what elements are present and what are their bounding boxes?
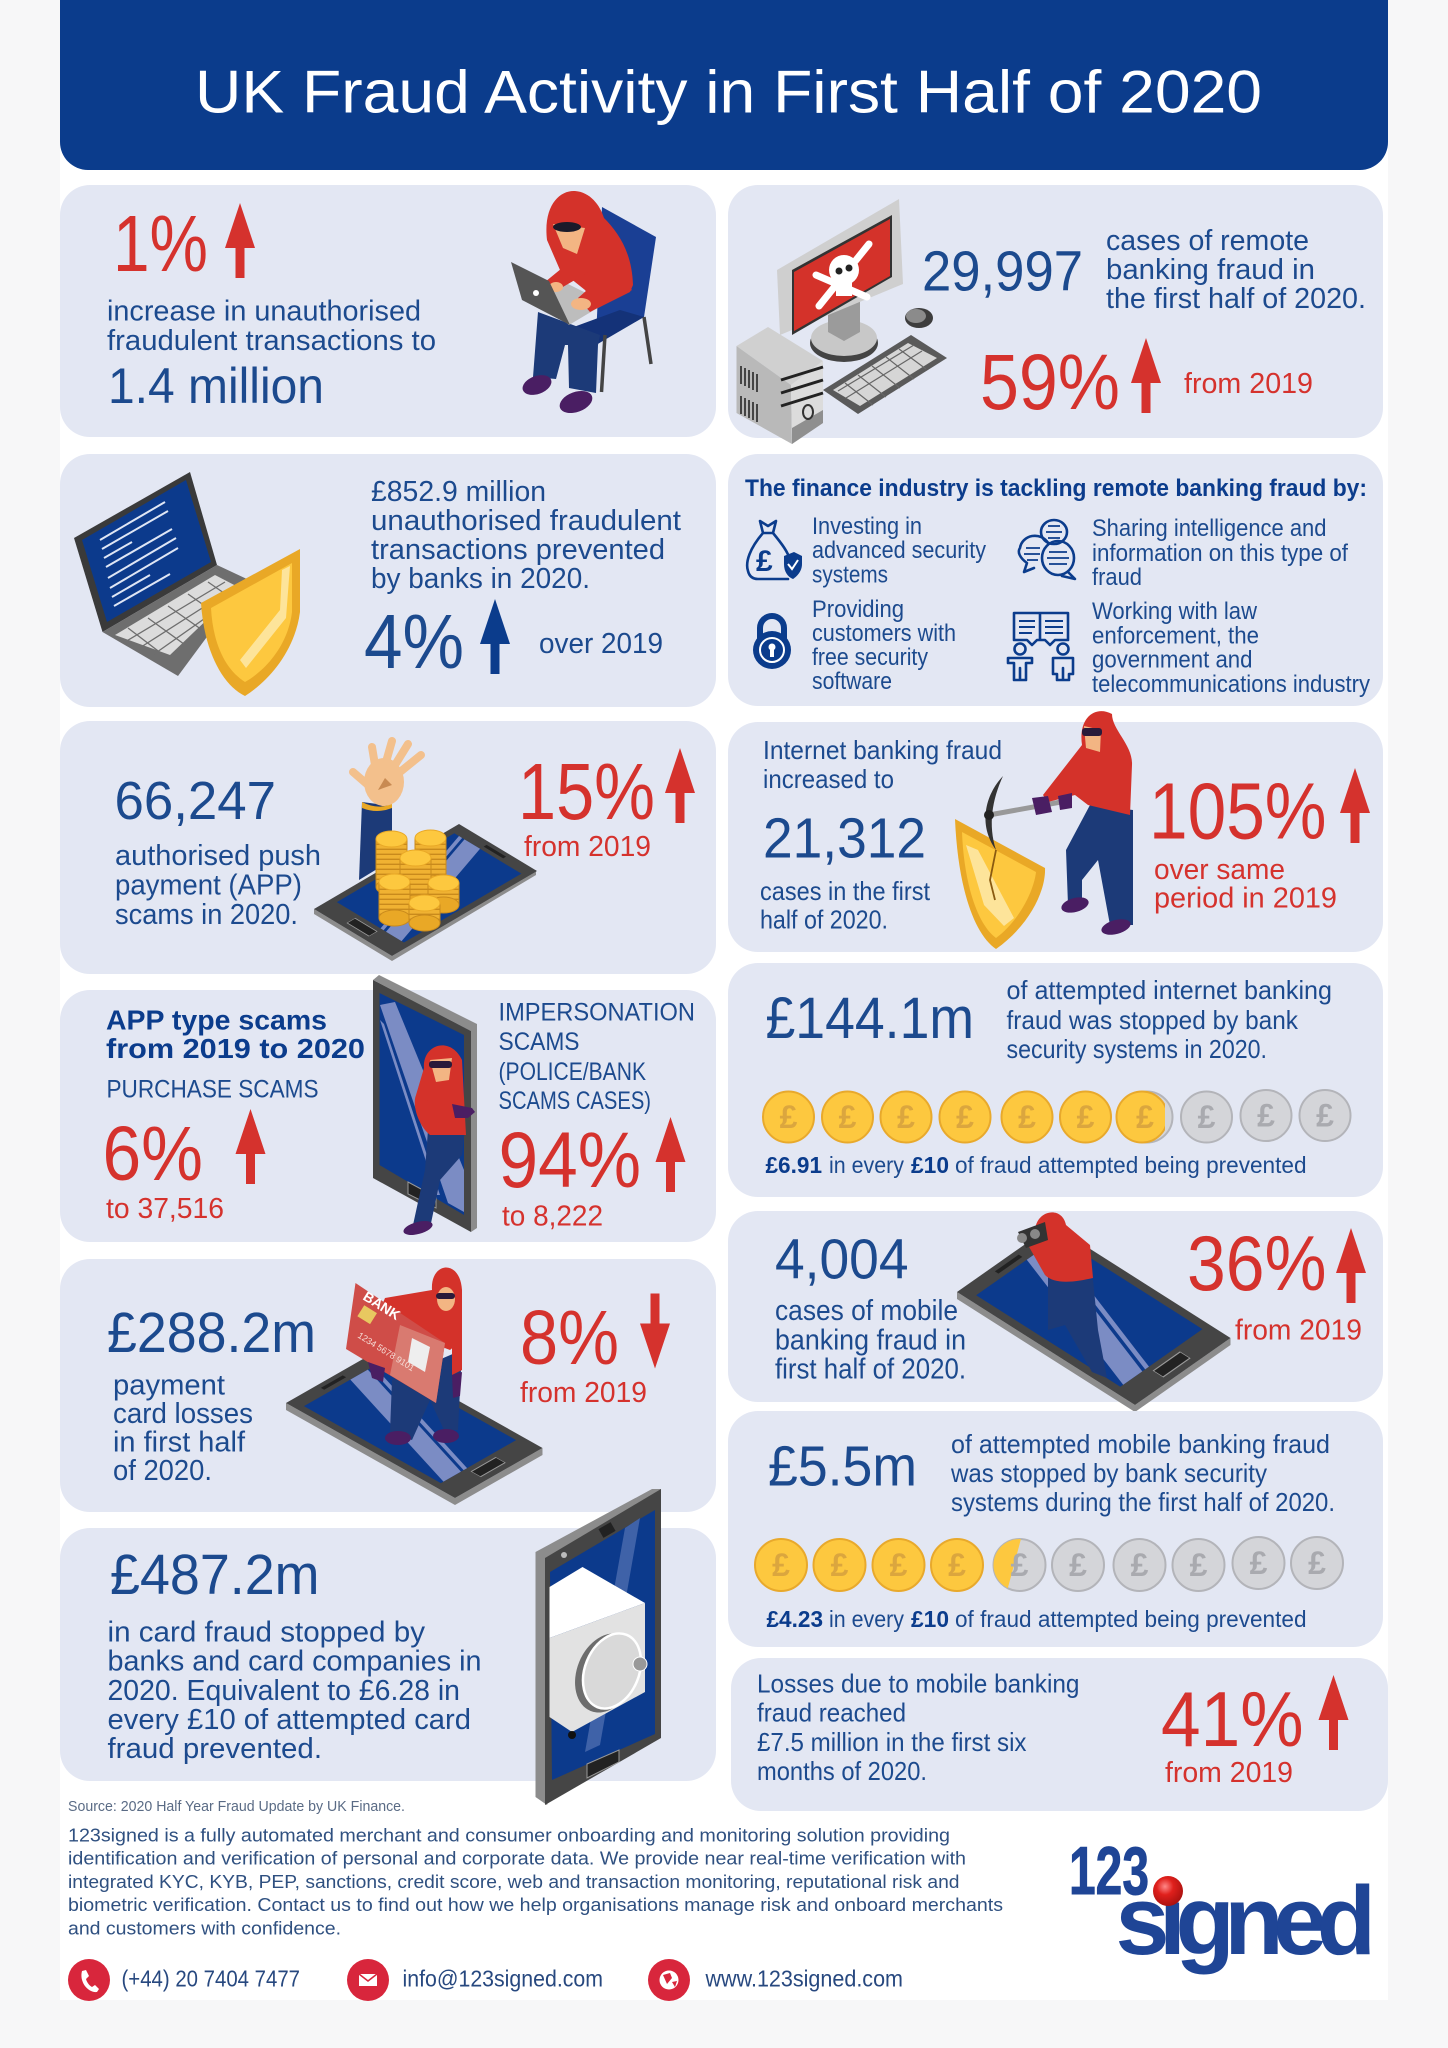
description: increase in unauthorised	[107, 296, 421, 328]
description: cases of remote	[1106, 225, 1309, 257]
item: advanced security systems: systems	[812, 562, 888, 588]
comparison label: over same	[1154, 854, 1285, 886]
stat: £288.2m: £288.2m	[107, 1301, 316, 1365]
caption: of fraud attempted being prevented	[955, 1152, 1306, 1178]
description: transactions prevented	[371, 534, 665, 566]
comparison label: period in 2019	[1154, 882, 1337, 914]
stat: 4,004: 4,004	[775, 1228, 908, 1292]
detail: to 37,516: to 37,516	[106, 1193, 224, 1225]
icon: fraudster stealing a bank card: 1234 5678 9101	[356, 1330, 416, 1373]
panel: internet banking fraud	[728, 711, 1383, 952]
description: every £10 of attempted card	[108, 1704, 471, 1736]
coins: 6.91 of 10	[763, 1090, 1350, 1142]
source note: Source: 2020 Half Year Fraud Update by UK Finance.	[68, 1798, 405, 1815]
stat: 15%: 15%	[518, 747, 655, 836]
panel: remote banking fraud cases	[728, 185, 1383, 444]
description: systems during the first half of 2020.	[951, 1487, 1335, 1517]
caption: £10	[911, 1606, 949, 1632]
description: the first half of 2020.	[1106, 283, 1366, 315]
arrow up	[656, 1117, 686, 1192]
panel: APP type scams	[60, 975, 716, 1242]
panel: authorised push payment scams	[60, 721, 716, 974]
contact: email: info@123signed.com	[402, 1966, 603, 1992]
icon: speech bubbles	[1019, 520, 1075, 579]
description: cases of mobile	[775, 1295, 958, 1327]
item: working with law enforcement: Working with law	[1092, 598, 1258, 625]
company description	[68, 1824, 1003, 1938]
arrow up	[480, 599, 510, 674]
comparison label: from 2019	[520, 1377, 647, 1409]
logo: 123signed: 123	[1069, 1833, 1149, 1909]
coins: 4.23 of 10	[755, 1537, 1343, 1591]
description: in first half	[113, 1426, 246, 1458]
caption: of fraud attempted being prevented	[955, 1606, 1306, 1632]
heading: from 2019 to 2020	[106, 1033, 365, 1064]
item: advanced security systems	[812, 513, 986, 588]
arrow up	[225, 203, 255, 278]
company description: 123signed is a fully automated merchant and consumer onboarding and monitoring solution providing	[68, 1824, 950, 1846]
description: Losses due to mobile banking	[757, 1668, 1080, 1698]
description: was stopped by bank security	[950, 1458, 1267, 1488]
contact: website: www.123signed.com	[705, 1966, 903, 1992]
item: sharing intelligence: information on this type of	[1092, 540, 1348, 567]
stat: 59%: 59%	[980, 337, 1120, 426]
description: first half of 2020.	[775, 1354, 966, 1386]
description: banking fraud in	[775, 1324, 966, 1356]
caption: in every	[829, 1152, 904, 1178]
description bottom: cases in the first	[760, 876, 931, 906]
coins: 4.23 of 10: £	[948, 1547, 966, 1583]
item: working with law enforcement	[1092, 598, 1370, 698]
heading: The finance industry is tackling remote banking fraud by:	[745, 475, 1367, 502]
description: fraud was stopped by bank	[1006, 1005, 1299, 1035]
coins: 6.91 of 10: £	[1077, 1099, 1095, 1135]
description	[1006, 975, 1332, 1064]
item: advanced security systems: Investing in	[812, 513, 922, 540]
label: impersonation scams: SCAMS CASES)	[498, 1087, 651, 1115]
item: free security software: software	[812, 668, 892, 695]
comparison label: from 2019	[1184, 368, 1313, 400]
arrow up	[236, 1109, 266, 1184]
caption: £4.23	[766, 1606, 823, 1632]
description bottom: half of 2020.	[760, 904, 888, 934]
title: UK Fraud Activity in First Half of 2020	[195, 58, 1262, 126]
coins: 6.91 of 10: £	[1257, 1098, 1275, 1134]
item: advanced security systems: advanced security	[812, 537, 986, 564]
caption: £10	[911, 1152, 949, 1178]
icon: money bag with shield	[747, 521, 802, 579]
detail: to 8,222: to 8,222	[502, 1200, 603, 1232]
coins: 6.91 of 10: £	[1316, 1098, 1334, 1134]
description	[107, 296, 436, 357]
description: £7.5 million in the first six	[757, 1727, 1026, 1757]
description: banking fraud in	[1106, 254, 1315, 286]
panel: unauthorised fraudulent transactions	[60, 185, 716, 437]
label: impersonation scams: SCAMS	[498, 1028, 580, 1056]
stat: £487.2m: £487.2m	[110, 1543, 320, 1607]
stat: 66,247: 66,247	[114, 771, 276, 831]
coins: 4.23 of 10: £	[1069, 1547, 1087, 1583]
item: working with law enforcement: telecommunications industry	[1092, 671, 1370, 698]
arrow down	[640, 1294, 670, 1368]
coins: 4.23 of 10: £	[890, 1547, 908, 1583]
description	[950, 1429, 1335, 1517]
description: payment (APP)	[115, 870, 302, 902]
description bottom	[760, 876, 931, 934]
description: 2020. Equivalent to £6.28 in	[108, 1675, 460, 1707]
description	[757, 1668, 1080, 1786]
stat: £5.5m: £5.5m	[768, 1434, 917, 1498]
stat: 8%: 8%	[520, 1295, 619, 1381]
comparison label: from 2019	[1235, 1314, 1362, 1346]
coins: 4.23 of 10: £	[772, 1547, 790, 1583]
description	[113, 1370, 253, 1487]
coins: 6.91 of 10: £	[1018, 1099, 1036, 1135]
stat: £144.1m: £144.1m	[766, 986, 974, 1051]
stat: 6%: 6%	[102, 1111, 203, 1197]
icon: fraudster breaking shield with pickaxe	[955, 711, 1133, 949]
contact: email	[347, 1959, 603, 2001]
item: free security software: customers with	[812, 620, 956, 647]
description top	[763, 735, 1002, 794]
company description: identification and verification of personal and corporate data. We provide near real-time verification with	[68, 1848, 966, 1868]
logo: 123signed: signed	[1116, 1866, 1376, 1975]
stat: 36%: 36%	[1187, 1219, 1326, 1307]
arrow up	[1318, 1675, 1348, 1750]
icon: fraudster stealing a bank card: BANK	[360, 1288, 403, 1323]
coins: 4.23 of 10: £	[831, 1547, 849, 1583]
coins: 4.23 of 10: £	[1131, 1547, 1149, 1583]
caption	[766, 1152, 1306, 1178]
icon: hand grabbing coins from phone	[314, 741, 537, 961]
icon: fraudster stepping out of phone	[373, 975, 477, 1238]
item: free security software: free security	[812, 644, 928, 671]
item: free security software	[812, 596, 956, 695]
panel: fraudulent transactions prevented	[60, 454, 716, 707]
label: impersonation scams: IMPERSONATION	[498, 998, 695, 1026]
description top: increased to	[763, 764, 894, 794]
description: fraud prevented.	[108, 1733, 322, 1765]
description: £852.9 million	[371, 476, 546, 508]
coins: 4.23 of 10: £	[1011, 1547, 1029, 1583]
item: sharing intelligence	[1092, 515, 1348, 591]
coins: 6.91 of 10: £	[839, 1099, 857, 1135]
description: security systems in 2020.	[1006, 1034, 1267, 1064]
description: of 2020.	[113, 1455, 212, 1487]
icon: bank safe inside phone	[536, 1489, 661, 1805]
comparison label: from 2019	[1165, 1757, 1293, 1789]
panel: card fraud stopped	[60, 1489, 716, 1805]
description: by banks in 2020.	[371, 563, 590, 595]
comparison label	[1154, 854, 1337, 914]
logo: 123signed	[1069, 1833, 1376, 1975]
comparison label: from 2019	[524, 831, 651, 863]
description: payment	[113, 1370, 225, 1402]
arrow up	[665, 748, 695, 823]
caption: £6.91	[766, 1152, 822, 1178]
coins: 6.91 of 10: £	[956, 1099, 974, 1135]
description: of attempted mobile banking fraud	[951, 1429, 1330, 1459]
item: sharing intelligence: fraud	[1092, 564, 1142, 591]
coins: 6.91 of 10: £	[897, 1099, 915, 1135]
icon: fraudster stealing a bank card	[286, 1267, 542, 1505]
stat: 1.4 million: 1.4 million	[108, 358, 324, 414]
label: impersonation scams: (POLICE/BANK	[498, 1058, 646, 1086]
description	[1106, 225, 1366, 315]
coins: 4.23 of 10: £	[1308, 1545, 1326, 1581]
description: in card fraud stopped by	[108, 1616, 425, 1648]
description: banks and card companies in	[108, 1646, 482, 1678]
stat: 105%: 105%	[1149, 766, 1326, 856]
heading: APP type scams	[106, 1004, 327, 1036]
coins: 4.23 of 10: £	[1190, 1547, 1208, 1583]
heading	[106, 1004, 365, 1064]
company description: biometric verification. Contact us to find out how we help organisations manage risk and onboard merchants	[68, 1894, 1003, 1915]
contact: phone: (+44) 20 7404 7477	[122, 1966, 300, 1992]
coins: 4.23 of 10: £	[1250, 1545, 1268, 1581]
coins: 6.91 of 10: £	[1136, 1099, 1154, 1135]
label: impersonation scams	[498, 998, 695, 1115]
description: of attempted internet banking	[1006, 975, 1332, 1005]
icon: hooded fraudster on a laptop	[511, 191, 656, 417]
company description: integrated KYC, KYB, PEP, sanctions, credit score, web and transaction monitoring, reputational risk and	[68, 1871, 960, 1892]
panel: payment card losses	[60, 1259, 716, 1512]
description: authorised push	[115, 840, 321, 872]
stat: 1%: 1%	[113, 199, 208, 288]
description	[775, 1295, 966, 1386]
description: scams in 2020.	[115, 899, 298, 931]
icon: fraudster with binoculars in phone	[957, 1212, 1230, 1412]
company description: and customers with confidence.	[68, 1918, 341, 1938]
stat: 21,312: 21,312	[763, 806, 926, 870]
description	[371, 476, 681, 595]
comparison label: over 2019	[539, 628, 663, 660]
description: fraudulent transactions to	[107, 325, 436, 357]
panel: attempted mobile banking fraud stopped	[728, 1411, 1383, 1647]
contact: website	[648, 1959, 903, 2001]
stat: 94%: 94%	[498, 1115, 641, 1204]
stat: 29,997: 29,997	[922, 240, 1083, 304]
item: working with law enforcement: enforcement, the	[1092, 622, 1259, 650]
icon: hacked desktop computer	[736, 199, 947, 444]
description	[108, 1616, 482, 1765]
label: purchase scams: PURCHASE SCAMS	[106, 1076, 318, 1104]
panel: mobile banking fraud losses	[731, 1658, 1388, 1811]
arrow up	[1340, 768, 1370, 843]
contact: phone	[68, 1959, 300, 2001]
icon: money bag with shield: £	[756, 545, 773, 578]
description: months of 2020.	[757, 1756, 927, 1786]
item: working with law enforcement: government and	[1092, 646, 1252, 674]
icon: laptop with gold shield	[74, 472, 300, 696]
icon: two people talking	[1008, 613, 1073, 680]
stat: 4%: 4%	[364, 599, 464, 685]
item: free security software: Providing	[812, 596, 904, 623]
arrow up	[1336, 1228, 1366, 1303]
description: card losses	[113, 1398, 253, 1430]
icon: padlock	[753, 616, 791, 669]
caption	[766, 1606, 1306, 1632]
coins: 6.91 of 10: £	[1198, 1099, 1216, 1135]
description: unauthorised fraudulent	[371, 505, 681, 537]
arrow up	[1131, 338, 1161, 413]
caption: in every	[829, 1606, 904, 1632]
panel: attempted internet banking fraud stopped	[728, 963, 1383, 1197]
panel: finance industry response	[728, 454, 1383, 706]
item: sharing intelligence: Sharing intelligence and	[1092, 515, 1326, 542]
description: fraud reached	[757, 1698, 906, 1728]
coins: 6.91 of 10: £	[780, 1099, 798, 1135]
title banner	[60, 0, 1388, 170]
stat: 41%: 41%	[1161, 1675, 1304, 1763]
description	[115, 840, 321, 931]
description top: Internet banking fraud	[763, 735, 1002, 765]
panel: mobile banking fraud	[728, 1211, 1383, 1412]
